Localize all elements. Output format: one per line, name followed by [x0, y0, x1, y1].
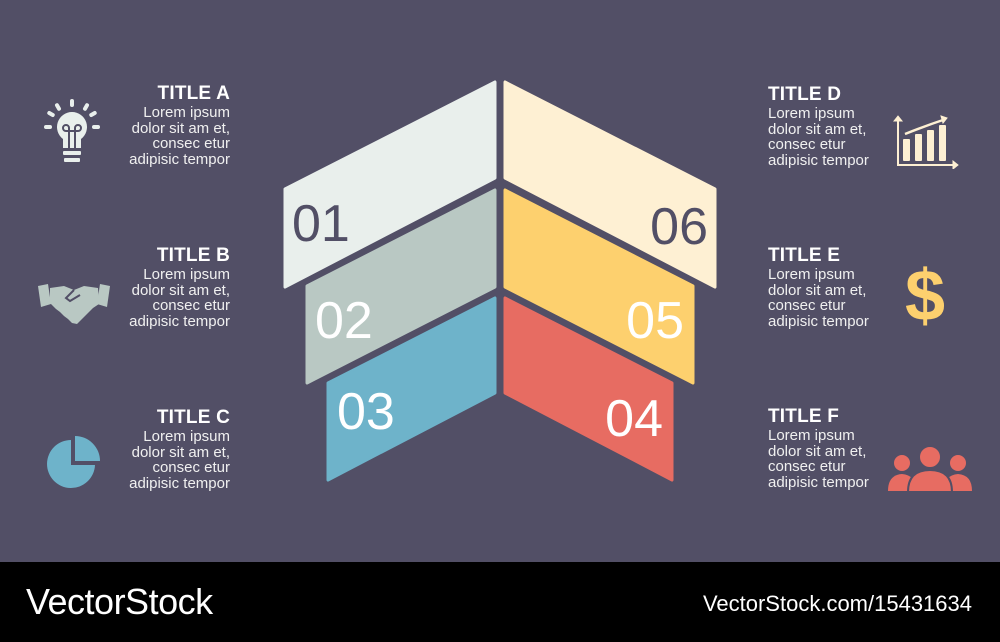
panel 03: 03	[337, 383, 395, 441]
text block: Title D: consec etur	[768, 136, 846, 153]
icon: dollar sign: $	[905, 256, 945, 336]
icon: pie chart	[47, 436, 100, 488]
text block: Title C: adipisic tempor	[129, 474, 230, 492]
panel 03	[328, 298, 495, 480]
text block: Title F	[768, 406, 869, 490]
icon: bar chart	[893, 115, 959, 169]
text block: Title F: dolor sit am et,	[768, 442, 866, 460]
panel 04: 04	[605, 390, 663, 448]
text block: Title B: dolor sit am et,	[132, 282, 230, 298]
text block: Title D: dolor sit am et,	[768, 120, 866, 138]
text block: Title E: dolor sit am et,	[768, 282, 866, 298]
text block: Title E: consec etur	[768, 297, 846, 314]
text block: Title F: consec etur	[768, 458, 846, 475]
panel 04	[505, 298, 672, 480]
text block: Title E: TITLE E	[768, 245, 840, 266]
text block: Title B: TITLE B	[157, 245, 230, 266]
text block: Title F: adipisic tempor	[768, 474, 869, 490]
panel 02: 02	[315, 292, 373, 350]
footer url: VectorStock.com/15431634	[703, 591, 972, 616]
icon: handshake	[38, 284, 110, 324]
text block: Title A: consec etur	[152, 135, 230, 152]
text block: Title C: Lorem ipsum	[143, 428, 230, 445]
text block: Title D	[768, 84, 869, 168]
text block: Title C	[129, 407, 230, 492]
text block: Title D: Lorem ipsum	[768, 105, 855, 122]
text block: Title E	[768, 245, 869, 330]
text block: Title E: adipisic tempor	[768, 312, 869, 330]
text block: Title A: adipisic tempor	[129, 150, 230, 168]
text block: Title F: TITLE F	[768, 406, 839, 427]
text block: Title E: Lorem ipsum	[768, 266, 855, 283]
text block: Title B	[129, 245, 230, 330]
panel 02	[307, 190, 495, 383]
text block: Title D: adipisic tempor	[768, 152, 869, 168]
footer logo: VectorStock	[26, 581, 213, 622]
text block: Title A: dolor sit am et,	[132, 120, 230, 136]
icon: light bulb	[44, 99, 100, 162]
text block: Title C: dolor sit am et,	[132, 444, 230, 460]
panel 01: 01	[292, 195, 350, 253]
panel 06	[505, 82, 715, 287]
text block: Title A	[129, 83, 230, 168]
footer bar	[0, 562, 1000, 642]
text block: Title D: TITLE D	[768, 84, 841, 105]
icon: people	[888, 447, 972, 491]
panel 01	[285, 82, 495, 287]
text block: Title B: Lorem ipsum	[143, 266, 230, 283]
text block: Title A: TITLE A	[158, 83, 230, 104]
text block: Title B: adipisic tempor	[129, 312, 230, 330]
panel 06: 06	[650, 198, 708, 256]
text block: Title B: consec etur	[152, 297, 230, 314]
panel 05	[505, 190, 693, 383]
text block: Title C: TITLE C	[157, 407, 230, 428]
panel 05: 05	[626, 292, 684, 350]
text block: Title C: consec etur	[152, 459, 230, 476]
text block: Title F: Lorem ipsum	[768, 427, 855, 444]
text block: Title A: Lorem ipsum	[143, 104, 230, 121]
